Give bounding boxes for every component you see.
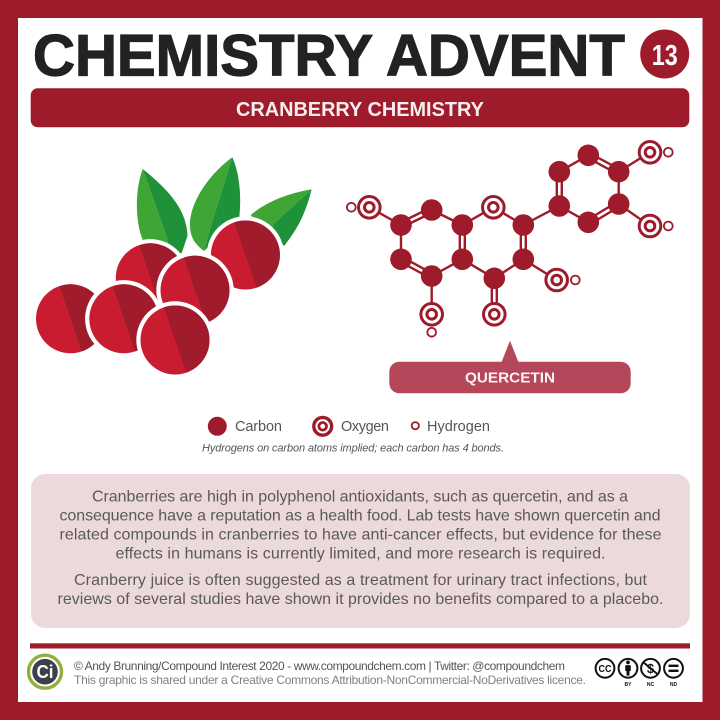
atom legend: [202, 417, 504, 455]
paragraph: antioxidants: [60, 489, 662, 562]
oxygen atoms: [358, 142, 661, 325]
explanatory text panel: [31, 474, 690, 628]
Compound Interest logo: [28, 655, 62, 688]
legend note: Hydrogens on carbon atoms implied; each carbon has 4 bonds.: [202, 443, 504, 455]
legend: oxygen: [314, 417, 389, 435]
legend: hydrogen: Hydrogen: [427, 419, 490, 435]
footer rule: [30, 643, 690, 648]
paragraph: urinary tract infections: Cranberry juice is often suggested as a treatment for urinary tract infections, but: [74, 572, 648, 589]
icon: CC: CC: [598, 663, 612, 675]
berry: back: [112, 239, 189, 316]
quercetin molecule diagram: [347, 142, 673, 337]
quercetin callout label: QUERCETIN: [465, 370, 555, 387]
icon: no derivatives: ND: [670, 682, 677, 688]
credit text: This graphic is shared under a Creative Commons Attribution-NonCommercial-NoDerivatives licence.: [74, 673, 586, 687]
credit text: [74, 659, 586, 687]
legend: oxygen: Oxygen: [341, 419, 389, 435]
legend: carbon: Carbon: [235, 419, 282, 435]
title: CHEMISTRY ADVENT: [33, 24, 625, 89]
berry: centre: [156, 252, 234, 329]
berry: far left: [32, 280, 109, 358]
credit text: © Andy Brunning/Compound Interest 2020 - www.compoundchem.com | Twitter: @compoundchem: [74, 659, 565, 673]
carbon atoms: [390, 144, 630, 289]
subtitle banner: [31, 88, 689, 127]
berry: bottom: [136, 301, 214, 379]
icon: non-commercial: [641, 659, 660, 688]
icon: non-commercial: NC: [647, 682, 654, 688]
legend: carbon: [208, 417, 282, 436]
day number badge: 13: [652, 39, 678, 72]
paragraph: antioxidants: Cranberries are high in polyphenol antioxidants, such as quercetin, and as a: [92, 489, 628, 506]
subtitle banner: CRANBERRY CHEMISTRY: [236, 99, 484, 121]
leaf: right: [251, 189, 312, 246]
berry: right: [207, 216, 284, 294]
paragraph: antioxidants: related compounds in cranberries to have anti-cancer effects, but evidence for these: [60, 527, 662, 544]
paragraph: urinary tract infections: reviews of several studies have shown it provides no benefits compared to a placebo.: [58, 591, 664, 608]
day number badge: [640, 30, 689, 78]
paragraph: urinary tract infections: [58, 572, 664, 608]
Compound Interest logo: Ci: [36, 662, 54, 682]
icon: attribution: BY: [625, 682, 632, 688]
quercetin callout label: [389, 341, 631, 393]
paragraph: antioxidants: effects in humans is currently limited, and more research is required.: [116, 546, 606, 562]
leaf: middle: [190, 157, 240, 251]
leaf: left: [137, 169, 188, 254]
berry: left: [85, 280, 162, 358]
molecule bonds: [369, 152, 650, 314]
icon: non-commercial: $: [647, 661, 655, 676]
Creative Commons licence icons: [596, 659, 683, 688]
hydrogen atoms: [347, 148, 673, 337]
cranberry illustration: [32, 157, 312, 379]
paragraph: antioxidants: consequence have a reputation as a health food. Lab tests have shown quercetin and: [60, 508, 660, 525]
